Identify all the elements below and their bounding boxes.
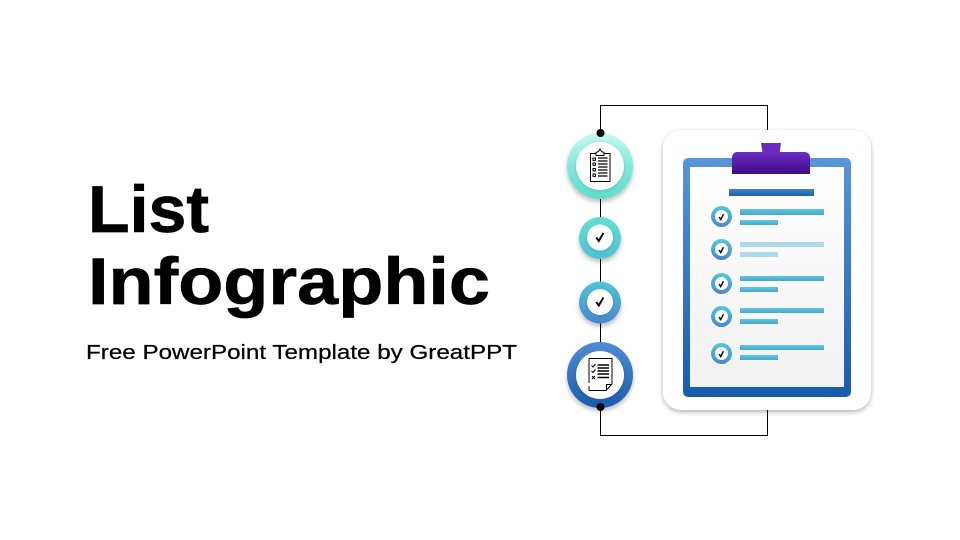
clipboard board [683, 158, 851, 397]
checklist item 5 [711, 343, 824, 364]
step circle: document [567, 342, 633, 408]
connector dot: bottom [596, 403, 604, 411]
clipboard clip [732, 143, 810, 174]
icon: check mark [596, 298, 603, 306]
clipboard paper [690, 167, 844, 387]
icon: document [589, 358, 612, 390]
step circle: check one [579, 217, 621, 259]
checklist item 1 [711, 206, 824, 227]
panel: clipboard card [663, 130, 871, 410]
step circle: check two [579, 282, 621, 324]
checklist item 2 [711, 239, 824, 260]
subtitle: Free PowerPoint Template by GreatPPT [86, 342, 517, 364]
checklist heading bar [729, 189, 814, 196]
title: Infographic [88, 244, 490, 318]
icon: check mark [596, 233, 603, 241]
checklist item 3 [711, 273, 824, 294]
step circle: clipboard [567, 133, 633, 199]
checklist item 4 [711, 306, 824, 327]
title: List [88, 172, 209, 246]
title [88, 172, 490, 318]
connector lines [600, 106, 768, 436]
connector dot: top [596, 129, 604, 137]
icon: clipboard [590, 149, 610, 182]
